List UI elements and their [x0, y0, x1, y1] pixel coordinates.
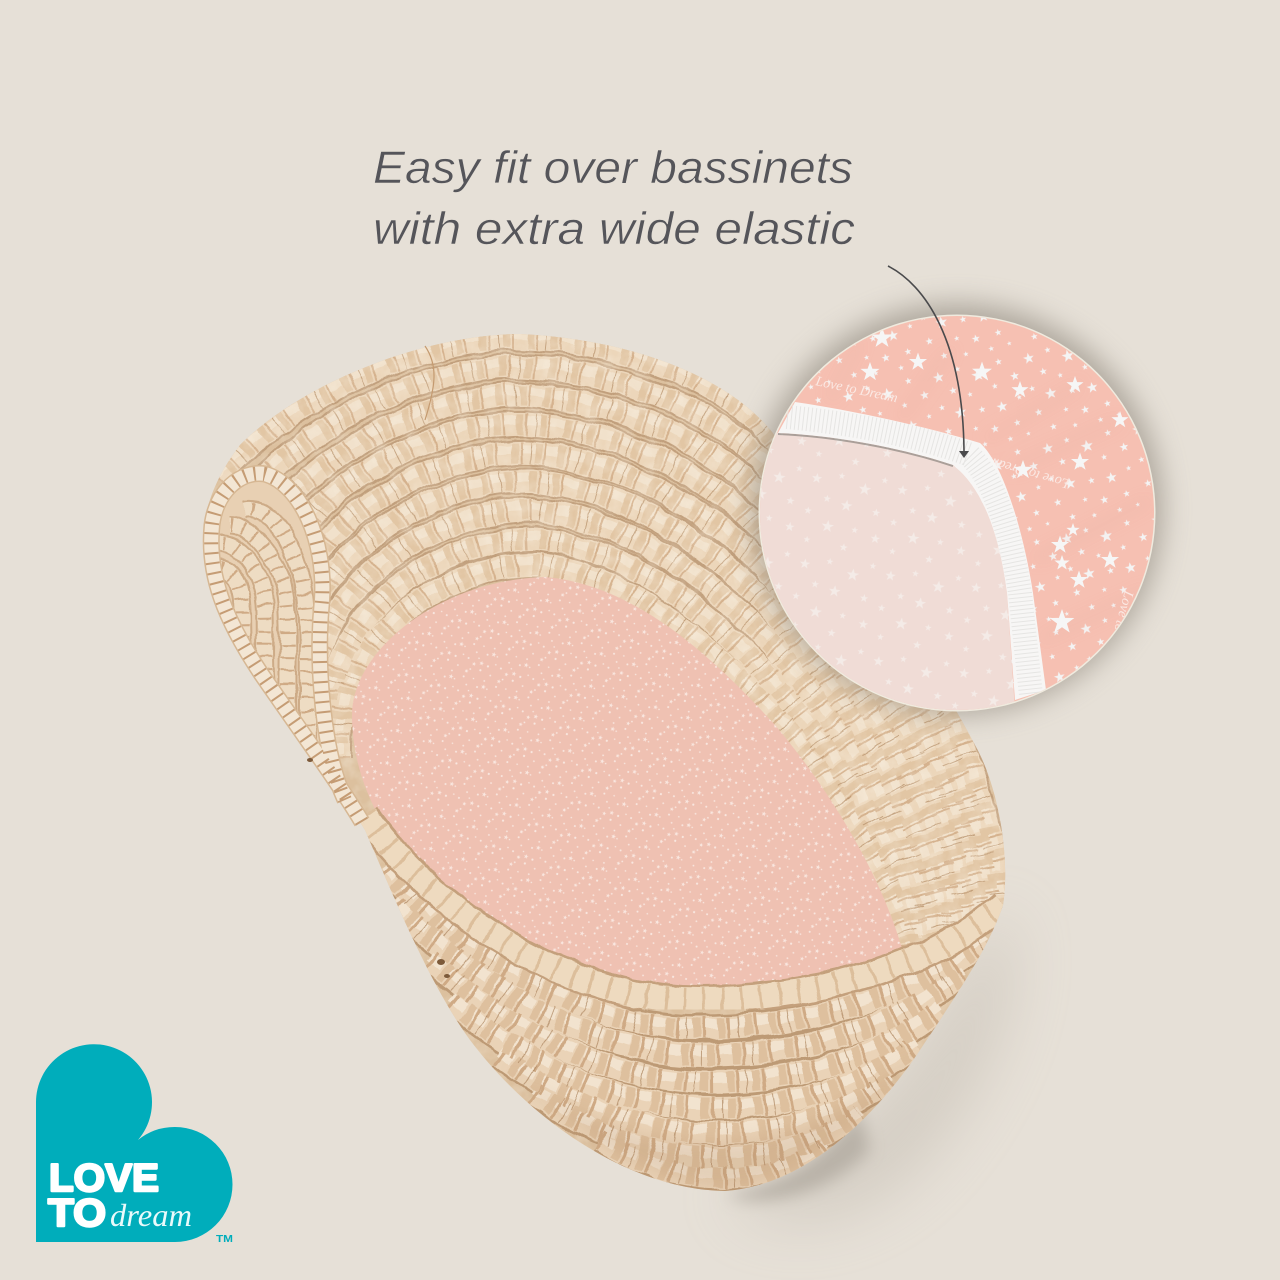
loose straw — [425, 346, 434, 420]
headline: Easy fit over bassinets — [373, 142, 853, 193]
magnified callout: elastic detail — [750, 310, 1160, 725]
headline — [373, 142, 855, 254]
logo wordmark: TO — [48, 1192, 106, 1235]
callout shadow — [752, 304, 1162, 714]
braided handle edge — [211, 474, 362, 822]
outer woven wall — [385, 866, 985, 1191]
logo heart — [36, 1044, 232, 1242]
brand logo — [36, 1044, 233, 1245]
front rim — [365, 815, 1003, 1000]
basket shadow — [725, 905, 1012, 1220]
straw grain — [200, 330, 1010, 1200]
fabric script print: Love to Dream — [987, 453, 1072, 491]
dark knots — [307, 758, 450, 978]
elastic ribs — [787, 417, 1031, 695]
white elastic band — [778, 402, 1046, 700]
fabric script print: Love to Dream — [813, 374, 899, 406]
fabric script print: Love to Dream — [1100, 588, 1136, 673]
handle — [205, 468, 365, 825]
callout ring — [758, 314, 1156, 712]
basket body — [205, 334, 1005, 1191]
fitted sheet base — [750, 432, 1016, 725]
salmon fabric — [755, 310, 1160, 720]
wall shading — [554, 1078, 892, 1190]
sheet edge shadow — [778, 434, 953, 466]
fabric script print — [813, 374, 1136, 673]
trademark: TM — [216, 1234, 233, 1245]
mattress sheet — [352, 577, 905, 1005]
large stars — [860, 327, 1129, 633]
inner woven rows — [200, 330, 1010, 1200]
headline: with extra wide elastic — [373, 203, 855, 254]
logo wordmark: LOVE — [49, 1157, 159, 1200]
bassinet basket — [200, 330, 1010, 1200]
logo script: dream — [110, 1197, 192, 1233]
arrow to elastic — [888, 266, 969, 458]
logo wordmark — [48, 1157, 159, 1235]
fabric gathers — [1066, 530, 1114, 606]
